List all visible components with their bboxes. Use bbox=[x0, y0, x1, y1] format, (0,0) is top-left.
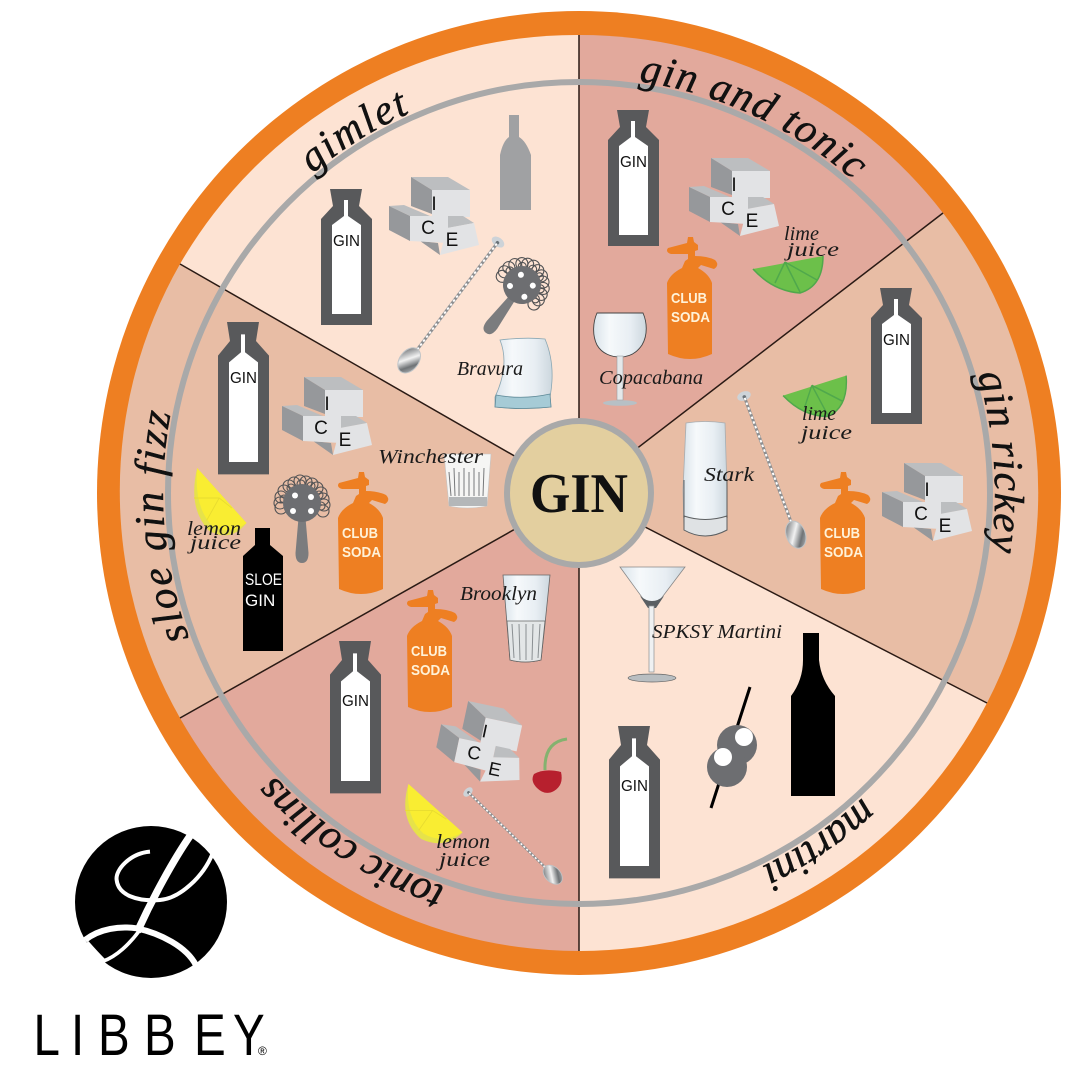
icon: gin bottle bbox=[871, 288, 922, 424]
icon: Winchester glass bbox=[444, 454, 491, 508]
icon: club soda bbox=[667, 237, 717, 359]
icon: gin bottle: GIN bbox=[230, 370, 257, 387]
label: lime juice: juice bbox=[783, 239, 839, 261]
label: Copacabana: Copacabana bbox=[599, 367, 703, 389]
icon: club soda bbox=[407, 590, 457, 712]
heading: gimlet: gimlet bbox=[306, 92, 408, 180]
icon: gin bottle bbox=[609, 726, 660, 878]
heading: tonic collins: tonic collins bbox=[260, 778, 443, 907]
icon: gin bottle: GIN bbox=[620, 154, 647, 171]
heading: martini: martini bbox=[762, 798, 874, 891]
label: lime juice: lime bbox=[784, 223, 819, 245]
icon: bar spoon bbox=[460, 784, 566, 888]
icon: vermouth bottle bbox=[791, 633, 835, 796]
icon: club soda: SODA bbox=[342, 544, 381, 561]
icon: ice cubes: C bbox=[914, 504, 928, 525]
logo: LIBBEY wordmark: LIBBEY bbox=[34, 1004, 265, 1068]
icon: club soda: CLUB bbox=[411, 643, 447, 660]
icon: ice cubes bbox=[882, 463, 972, 541]
label: Winchester: Winchester bbox=[378, 446, 483, 468]
icon: ice cubes: C bbox=[421, 218, 435, 239]
label: lemon juice: lemon bbox=[436, 831, 490, 853]
label: SPKSY Martini: SPKSY Martini bbox=[652, 621, 782, 643]
label: lime juice: lime bbox=[802, 403, 836, 425]
icon: ice cubes: I bbox=[324, 394, 330, 415]
icon: sloe gin bottle bbox=[243, 528, 283, 651]
icon: ice cubes: I bbox=[431, 194, 437, 215]
icon: gin bottle bbox=[330, 641, 381, 793]
icon: club soda: SODA bbox=[824, 544, 863, 561]
panel: tonic collins wedge bbox=[180, 493, 579, 951]
icon: sloe gin bottle: GIN bbox=[245, 591, 275, 610]
icon: ice cubes: C bbox=[465, 741, 483, 764]
icon: club soda: SODA bbox=[671, 309, 710, 326]
icon: ice cubes: E bbox=[487, 758, 503, 781]
label: lemon juice: lemon bbox=[187, 518, 241, 540]
icon: olives on a pick bbox=[707, 687, 757, 808]
panel: gin and tonic wedge bbox=[579, 35, 943, 493]
icon: bar spoon bbox=[393, 233, 508, 377]
icon: gin bottle: GIN bbox=[333, 233, 360, 250]
label: lemon juice: juice bbox=[435, 849, 490, 871]
icon: club soda bbox=[338, 472, 388, 594]
icon: gin bottle: GIN bbox=[342, 693, 369, 710]
label: lime juice: juice bbox=[797, 422, 852, 444]
icon: bar spoon bbox=[734, 388, 810, 551]
icon: Copacabana glass bbox=[594, 313, 646, 406]
panel: gin rickey wedge bbox=[579, 213, 1038, 703]
icon: ice cubes bbox=[282, 377, 372, 455]
icon: Brooklyn glass bbox=[503, 575, 550, 662]
icon: lemon wedge bbox=[405, 784, 462, 843]
icon: gin bottle bbox=[608, 110, 659, 246]
label: lime juice bbox=[797, 403, 852, 444]
icon: ice cubes: E bbox=[446, 230, 458, 251]
icon: cherry bbox=[533, 739, 567, 793]
icon: gin bottle: GIN bbox=[621, 778, 648, 795]
icon: club soda: SODA bbox=[411, 662, 450, 679]
panel: gimlet wedge bbox=[180, 35, 579, 493]
icon: lime wedge bbox=[753, 256, 823, 293]
label: lime juice bbox=[783, 223, 839, 261]
label: lemon juice: juice bbox=[186, 532, 241, 554]
icon: club soda: CLUB bbox=[342, 525, 378, 542]
icon: Bravura glass bbox=[495, 338, 552, 408]
icon: club soda: CLUB bbox=[824, 525, 860, 542]
icon: strainer bbox=[274, 475, 330, 563]
icon: grey bottle bbox=[500, 115, 531, 210]
icon: sloe gin bottle: SLOE bbox=[245, 570, 282, 589]
center badge: GIN: GIN bbox=[530, 463, 628, 525]
label: Brooklyn: Brooklyn bbox=[460, 583, 537, 605]
icon: ice cubes: E bbox=[339, 430, 351, 451]
label: Stark: Stark bbox=[704, 464, 755, 486]
icon: strainer bbox=[464, 246, 561, 350]
heading: sloe gin fizz: sloe gin fizz bbox=[134, 410, 188, 641]
icon: ice cubes: E bbox=[746, 211, 758, 232]
icon: club soda bbox=[820, 472, 870, 594]
icon: lemon wedge bbox=[194, 468, 246, 535]
heading: gin and tonic: gin and tonic bbox=[637, 59, 866, 176]
icon: Martini glass bbox=[620, 567, 685, 682]
icon: ice cubes: I bbox=[480, 720, 490, 742]
icon: ice cubes bbox=[689, 158, 779, 236]
icon: ice cubes: I bbox=[924, 480, 930, 501]
icon: ice cubes: C bbox=[721, 199, 735, 220]
label: lemon juice bbox=[186, 518, 241, 554]
icon: club soda: CLUB bbox=[671, 290, 707, 307]
logo: Libbey emblem bbox=[75, 826, 227, 978]
logo: registered mark: ® bbox=[258, 1044, 267, 1058]
panel: sloe gin fizz wedge bbox=[120, 264, 579, 718]
icon: ice cubes: E bbox=[939, 516, 951, 537]
icon: gin bottle: GIN bbox=[883, 332, 910, 349]
label: Bravura: Bravura bbox=[457, 358, 523, 380]
icon: ice cubes bbox=[431, 696, 533, 790]
heading: gin rickey: gin rickey bbox=[970, 373, 1024, 554]
icon: Stark glass bbox=[683, 422, 727, 536]
icon: gin bottle bbox=[218, 322, 269, 474]
icon: ice cubes bbox=[389, 177, 479, 255]
icon: ice cubes: C bbox=[314, 418, 328, 439]
center badge: GIN bbox=[507, 421, 651, 565]
icon: lime wedge bbox=[782, 376, 849, 421]
wheel: outer orange ring bbox=[97, 11, 1061, 975]
panel: martini wedge bbox=[579, 493, 987, 951]
icon: ice cubes: I bbox=[731, 175, 737, 196]
label: lemon juice bbox=[435, 831, 490, 871]
icon: gin bottle bbox=[321, 189, 372, 325]
